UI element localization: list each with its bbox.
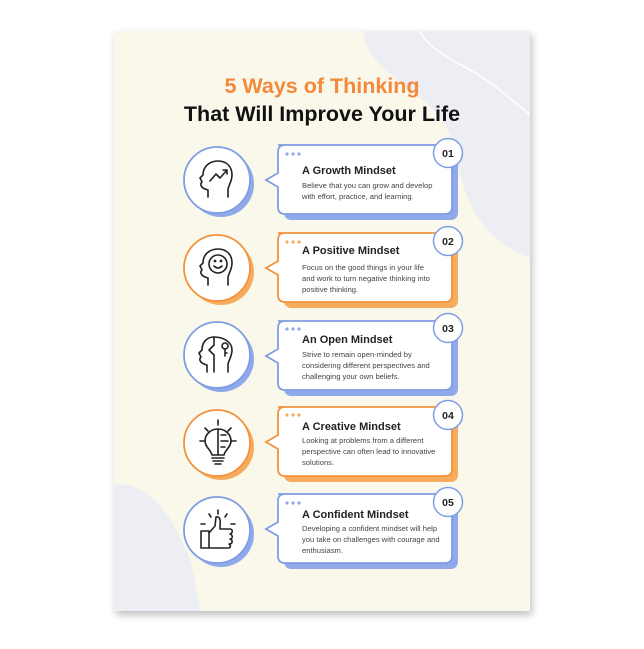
- row 1: [184, 138, 462, 220]
- row 2: Focus on the good things in your life: [302, 263, 424, 272]
- title: 5 Ways of Thinking: [224, 74, 420, 98]
- row 5: enthusiasm.: [302, 546, 343, 555]
- row 5: A Confident Mindset: [302, 509, 409, 521]
- icon: open head: [199, 337, 232, 372]
- row 4: [184, 400, 462, 482]
- row 2: and work to turn negative thinking into: [302, 274, 430, 283]
- row 5: Developing a confident mindset will help: [302, 524, 437, 533]
- icon: lightbulb brain: [200, 420, 236, 464]
- row 3: considering different perspectives and: [302, 361, 430, 370]
- row 4: Looking at problems from a different: [302, 436, 424, 445]
- row 2: [184, 226, 462, 308]
- row 2: positive thinking.: [302, 285, 358, 294]
- row 3: An Open Mindset: [302, 334, 393, 346]
- row 5: [184, 488, 462, 569]
- row 1: A Growth Mindset: [302, 165, 396, 177]
- icon: growth head: [200, 161, 232, 197]
- row 5: you take on challenges with courage and: [302, 535, 440, 544]
- row 2: 02: [442, 236, 454, 248]
- row 4: perspective can often lead to innovative: [302, 447, 435, 456]
- row 4: 04: [442, 410, 454, 422]
- icon: positive head: [200, 249, 232, 285]
- row 3: challenging your own beliefs.: [302, 372, 400, 381]
- row 1: Believe that you can grow and develop: [302, 181, 432, 190]
- row 3: 03: [442, 323, 454, 335]
- row 4: solutions.: [302, 458, 334, 467]
- poster shadow: [116, 35, 532, 615]
- row 3: Strive to remain open-minded by: [302, 350, 412, 359]
- row 5: 05: [442, 497, 454, 509]
- row 4: A Creative Mindset: [302, 421, 401, 433]
- poster: [114, 31, 530, 611]
- blob bottom left: [114, 485, 200, 611]
- row 1: with effort, practice, and learning.: [301, 192, 414, 201]
- icon: thumbs up: [201, 510, 235, 548]
- title: [184, 74, 460, 126]
- row 1: 01: [442, 148, 454, 160]
- blob top right: [363, 31, 530, 258]
- row 3: [184, 314, 462, 396]
- row 2: A Positive Mindset: [302, 245, 400, 257]
- title: That Will Improve Your Life: [184, 102, 460, 126]
